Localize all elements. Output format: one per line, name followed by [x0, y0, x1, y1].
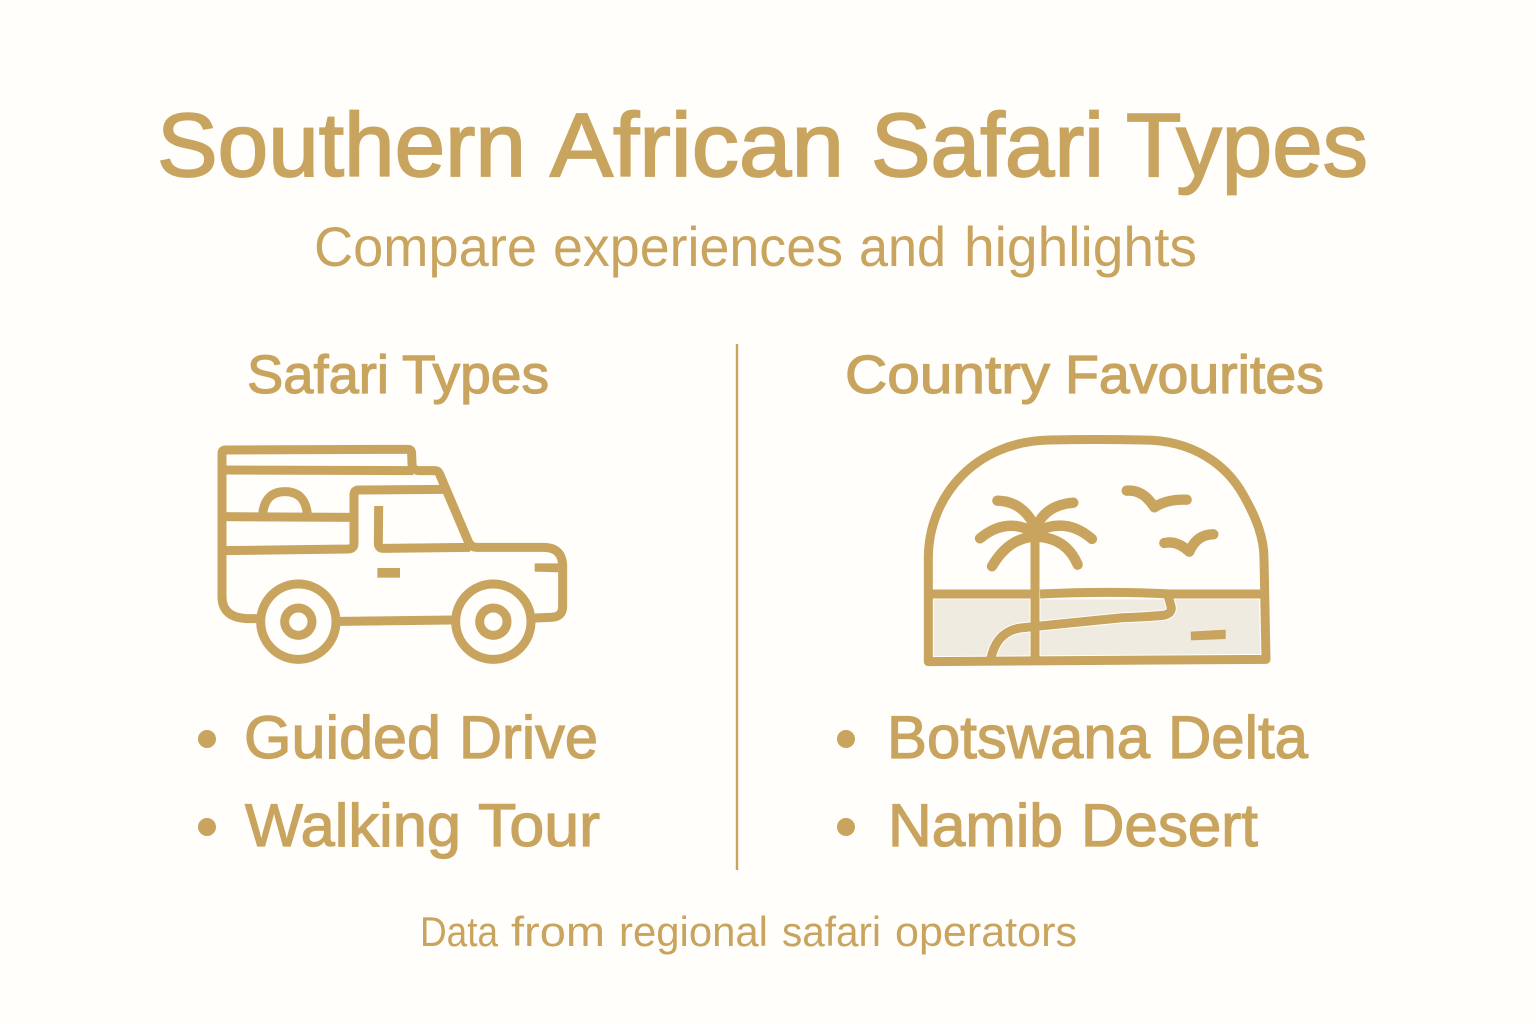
list: safari types: Tour — [478, 792, 600, 859]
list: country favourites — [837, 704, 1309, 859]
list: country favourites: Botswana — [887, 704, 1151, 771]
icon: safari jeep — [222, 449, 563, 659]
subtitle: and — [859, 215, 946, 278]
heading: safari types: Types — [402, 345, 549, 405]
footer source note: Data — [420, 908, 499, 955]
list: safari types: Guided — [244, 704, 441, 771]
subtitle: Compare — [314, 215, 537, 278]
footer source note: operators — [895, 908, 1077, 955]
list: safari types: Drive — [459, 704, 598, 771]
list: safari types — [198, 704, 600, 859]
list: safari types: Walking — [245, 792, 461, 859]
heading: safari types — [247, 345, 549, 405]
title — [157, 96, 1368, 196]
title: Types — [1126, 96, 1368, 196]
title: Safari — [871, 96, 1104, 196]
subtitle — [314, 215, 1197, 278]
panel: country favourites — [837, 345, 1324, 859]
subtitle: highlights — [964, 215, 1197, 278]
heading: country favourites: Favourites — [1065, 345, 1324, 405]
subtitle: experiences — [553, 215, 843, 278]
list: country favourites: Delta — [1168, 704, 1309, 771]
title: Southern — [157, 96, 526, 196]
heading: country favourites: Country — [845, 345, 1050, 405]
panel: safari types — [198, 345, 600, 859]
icon: palm and birds landscape — [928, 439, 1266, 662]
footer source note: regional — [619, 908, 768, 955]
footer source note: from — [511, 908, 605, 955]
footer source note — [420, 908, 1077, 955]
divider — [736, 344, 738, 870]
heading: safari types: Safari — [247, 345, 389, 405]
title: African — [550, 96, 844, 196]
footer source note: safari — [782, 908, 881, 955]
heading: country favourites — [845, 345, 1324, 405]
list: country favourites: Namib — [888, 792, 1063, 859]
list: country favourites: Desert — [1081, 792, 1258, 859]
